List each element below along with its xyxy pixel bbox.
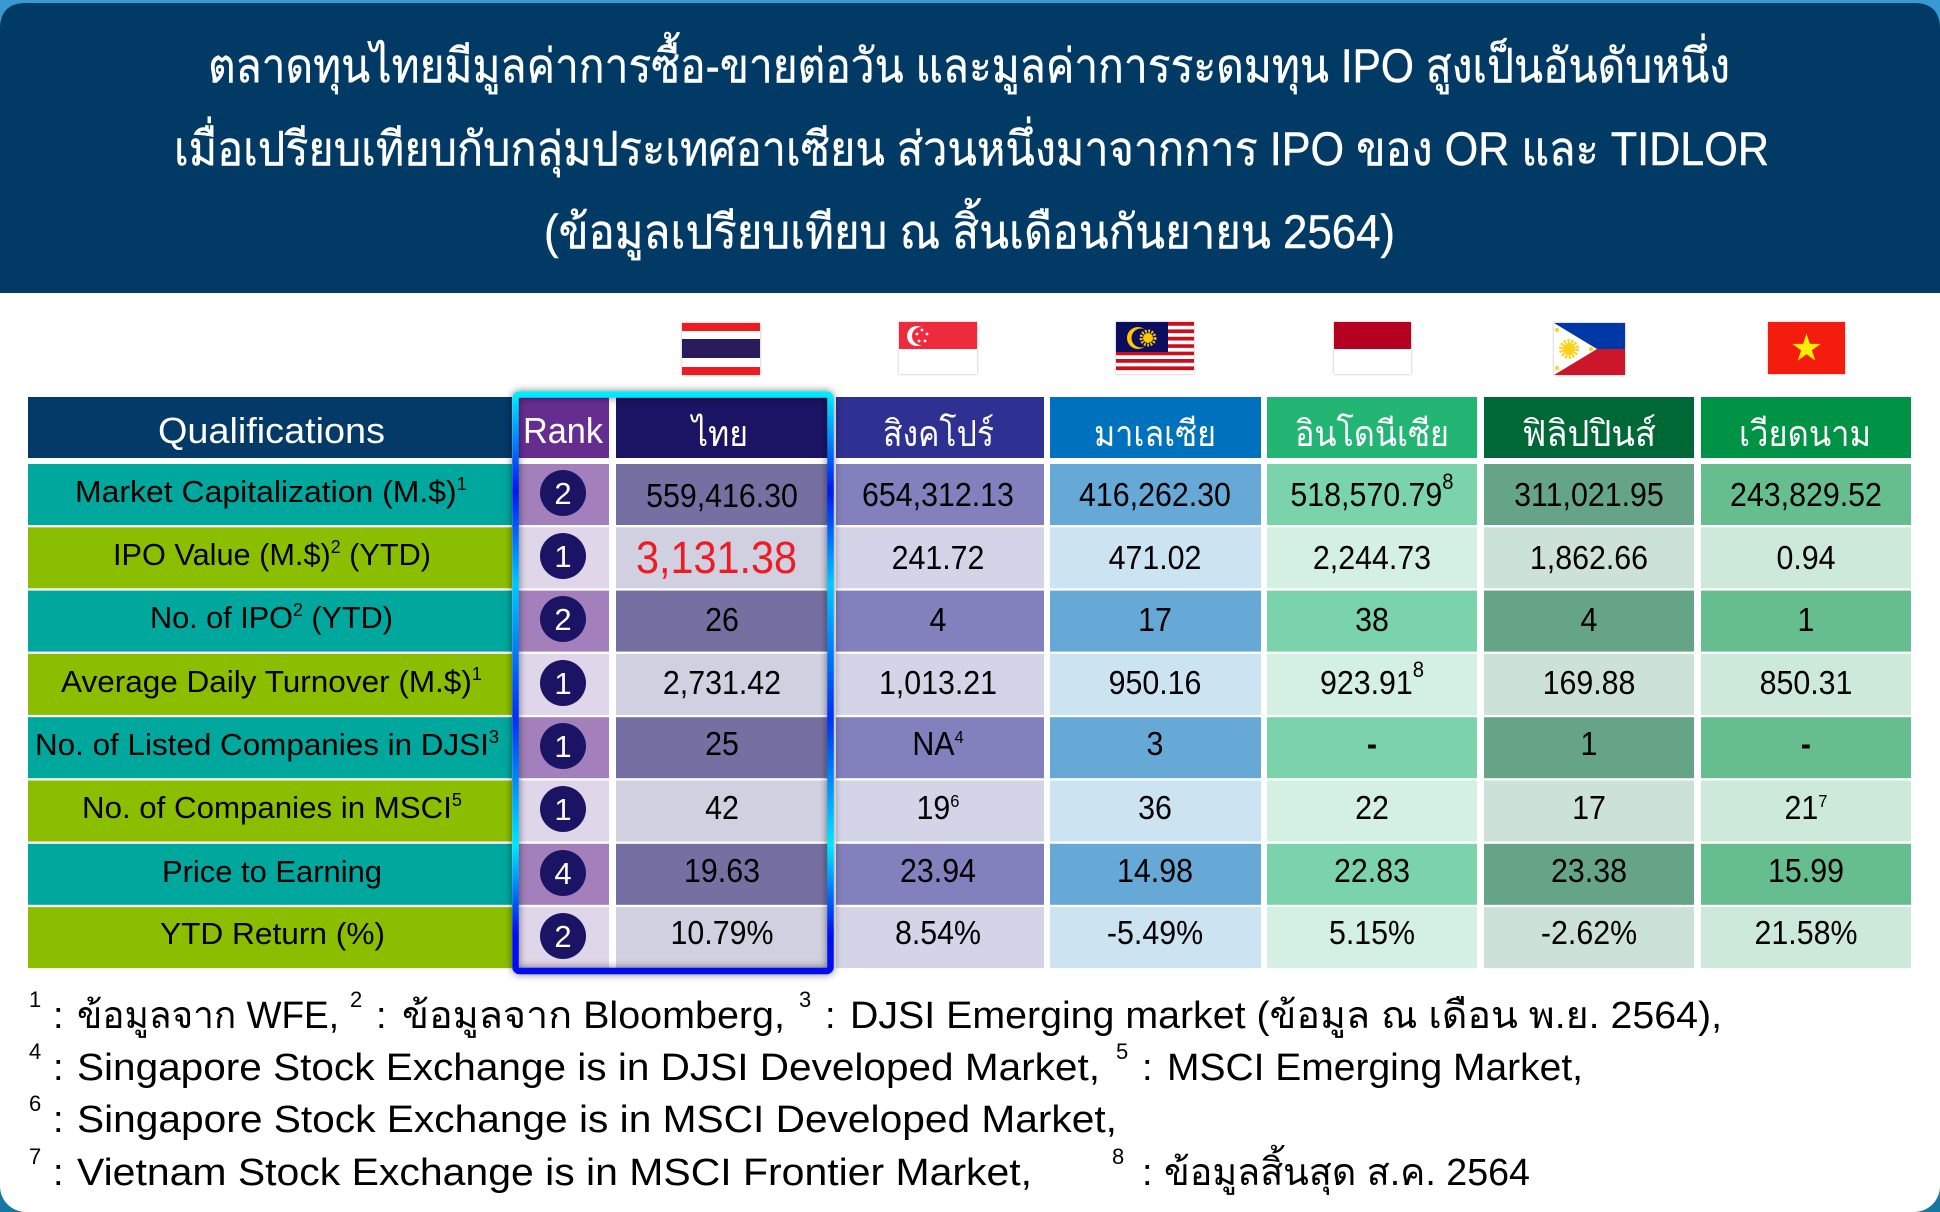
footnote line 1: : bbox=[376, 995, 387, 1037]
row: YTD Return: 5.15% bbox=[1329, 914, 1415, 951]
footnote line 2 bbox=[29, 1039, 1583, 1089]
row: No. of IPO: No. of IPO bbox=[150, 600, 295, 635]
footnote line 2: : bbox=[53, 1047, 64, 1089]
row: No. of Companies in MSCI: 1 bbox=[554, 792, 572, 827]
row: No. of Listed Companies in DJSI: 1 bbox=[554, 729, 572, 764]
row: Price to Earning: 22.83 bbox=[1334, 852, 1410, 889]
row: YTD Return: YTD Return (%) bbox=[160, 916, 385, 951]
footnote line 4: 7 bbox=[29, 1144, 41, 1169]
footnote line 2: 5 bbox=[1116, 1039, 1128, 1064]
row: Average Daily Turnover: 1 bbox=[554, 666, 572, 701]
row: YTD Return: -5.49% bbox=[1107, 914, 1203, 951]
row: IPO Value bbox=[28, 527, 1911, 588]
footnote line 4 bbox=[29, 1144, 1530, 1195]
row: Average Daily Turnover: 923.91 bbox=[1320, 664, 1413, 701]
header: Rank bbox=[516, 397, 609, 458]
footnote line 1: ข้อมูลจาก Bloomberg, bbox=[402, 995, 785, 1038]
row: No. of Listed Companies in DJSI: NA bbox=[912, 725, 954, 762]
row: No. of Companies in MSCI: 21 bbox=[1785, 789, 1818, 826]
row: No. of Listed Companies in DJSI bbox=[28, 717, 1911, 778]
row: Price to Earning: 4 bbox=[554, 856, 572, 891]
footnote line 3: 6 bbox=[29, 1091, 41, 1116]
flag: Vietnam bbox=[1768, 322, 1845, 374]
footnote line 4: : bbox=[53, 1152, 64, 1194]
row: No. of IPO: 4 bbox=[1581, 601, 1597, 638]
row: IPO Value: 2,244.73 bbox=[1313, 539, 1431, 576]
flag: Thailand bbox=[682, 323, 760, 375]
row: Average Daily Turnover: Average Daily Turnover (M.$) bbox=[61, 664, 465, 699]
table header row bbox=[28, 397, 1911, 458]
row: YTD Return: 10.79% bbox=[671, 914, 773, 951]
row: IPO Value: (YTD) bbox=[341, 537, 431, 572]
row: No. of IPO: 1 bbox=[1798, 601, 1814, 638]
title banner: (ข้อมูลเปรียบเทียบ ณ สิ้นเดือนกันยายน 2564) bbox=[544, 198, 1395, 261]
row: No. of IPO: 38 bbox=[1355, 601, 1389, 638]
footnote line 2: Singapore Stock Exchange is in DJSI Developed Market, bbox=[77, 1047, 1100, 1089]
header: Thailand: ไทย bbox=[689, 413, 748, 454]
row: Market Capitalization: 518,570.79 bbox=[1290, 476, 1442, 513]
row: YTD Return: 21.58% bbox=[1755, 914, 1857, 951]
row: Market Capitalization: 243,829.52 bbox=[1730, 476, 1882, 513]
footnote line 1: 3 bbox=[799, 987, 811, 1012]
highlight frame around Thailand column bbox=[516, 394, 830, 971]
header: Indonesia bbox=[1267, 397, 1477, 458]
header: Qualifications: Qualifications bbox=[158, 410, 385, 451]
row: No. of Listed Companies in DJSI: - bbox=[1801, 725, 1811, 762]
footnote line 1 bbox=[29, 987, 1722, 1038]
row: Market Capitalization bbox=[28, 464, 1911, 525]
header: Singapore: สิงคโปร์ bbox=[883, 413, 994, 454]
footnote line 4: Vietnam Stock Exchange is in MSCI Frontier Market, bbox=[77, 1152, 1032, 1194]
header: Philippines bbox=[1484, 397, 1694, 458]
row: Average Daily Turnover bbox=[28, 654, 1911, 715]
row: No. of IPO: (YTD) bbox=[303, 600, 393, 635]
row: No. of Listed Companies in DJSI: 3 bbox=[1147, 725, 1163, 762]
row: Market Capitalization: 8 bbox=[1442, 470, 1454, 494]
row: IPO Value: IPO Value (M.$) bbox=[113, 537, 333, 572]
header: Vietnam: เวียดนาม bbox=[1739, 413, 1871, 454]
row: Market Capitalization: Market Capitalization (M.$) bbox=[75, 474, 445, 509]
row: No. of Companies in MSCI bbox=[28, 780, 1911, 842]
footnote line 4: ข้อมูลสิ้นสุด ส.ค. 2564 bbox=[1164, 1144, 1530, 1195]
row: YTD Return: 2 bbox=[554, 919, 572, 954]
header: Malaysia: มาเลเซีย bbox=[1094, 413, 1216, 454]
footnote line 2: : bbox=[1142, 1047, 1153, 1089]
row: Price to Earning bbox=[28, 844, 1911, 905]
row: No. of Companies in MSCI: No. of Companies in MSCI bbox=[82, 790, 449, 825]
row: IPO Value: 0.94 bbox=[1776, 539, 1836, 576]
row: No. of Companies in MSCI: 19 bbox=[917, 789, 950, 826]
footnote line 1: 2 bbox=[350, 987, 362, 1012]
flag: Malaysia bbox=[1116, 322, 1194, 374]
row: Market Capitalization: 416,262.30 bbox=[1079, 476, 1231, 513]
row: Market Capitalization: 654,312.13 bbox=[862, 476, 1014, 513]
title banner bbox=[0, 3, 1940, 293]
footnote line 1: : bbox=[825, 995, 836, 1037]
row: IPO Value: 471.02 bbox=[1109, 539, 1201, 576]
row: No. of IPO: 17 bbox=[1138, 601, 1172, 638]
row: IPO Value: 241.72 bbox=[892, 539, 984, 576]
footnote line 1: DJSI Emerging market (ข้อมูล ณ เดือน พ.ย. 2564), bbox=[850, 995, 1722, 1038]
row: Market Capitalization: 311,021.95 bbox=[1514, 476, 1664, 513]
row: IPO Value: 1,862.66 bbox=[1530, 539, 1648, 576]
flag: Singapore bbox=[899, 322, 977, 374]
row: Average Daily Turnover: 169.88 bbox=[1543, 664, 1635, 701]
footnotes bbox=[29, 987, 1722, 1195]
row: No. of Companies in MSCI: 5 bbox=[452, 790, 462, 810]
row: YTD Return bbox=[28, 907, 1911, 968]
row: IPO Value: 1 bbox=[554, 539, 572, 574]
row: No. of Listed Companies in DJSI: No. of Listed Companies in DJSI bbox=[35, 727, 483, 762]
row: Price to Earning: 23.38 bbox=[1551, 852, 1627, 889]
row: YTD Return: -2.62% bbox=[1541, 914, 1637, 951]
row: Price to Earning: 15.99 bbox=[1768, 852, 1844, 889]
flag: Philippines bbox=[1554, 323, 1625, 375]
footnote line 2: MSCI Emerging Market, bbox=[1167, 1047, 1583, 1089]
row: Average Daily Turnover: 850.31 bbox=[1760, 664, 1852, 701]
footnote line 2: 4 bbox=[29, 1039, 41, 1064]
footnote line 3: Singapore Stock Exchange is in MSCI Developed Market, bbox=[77, 1099, 1117, 1141]
row: Market Capitalization: 559,416.30 bbox=[646, 477, 798, 514]
row: No. of IPO: 2 bbox=[554, 602, 572, 637]
row: No. of IPO: 26 bbox=[705, 601, 739, 638]
header: Vietnam bbox=[1701, 397, 1911, 458]
row: No. of Listed Companies in DJSI: 4 bbox=[954, 726, 964, 747]
header: Rank: Rank bbox=[523, 410, 604, 451]
row: No. of IPO: 4 bbox=[930, 601, 946, 638]
row: No. of Listed Companies in DJSI: 3 bbox=[489, 727, 499, 747]
row: Price to Earning: 19.63 bbox=[684, 852, 760, 889]
row: Average Daily Turnover: 950.16 bbox=[1109, 664, 1201, 701]
row: Market Capitalization: 1 bbox=[457, 474, 467, 494]
row: IPO Value: 2 bbox=[331, 537, 341, 557]
row: No. of Companies in MSCI: 7 bbox=[1818, 790, 1827, 811]
footnote line 1: ข้อมูลจาก WFE, bbox=[77, 995, 339, 1038]
row: No. of Companies in MSCI: 6 bbox=[950, 790, 959, 811]
footnote line 4: 8 bbox=[1112, 1144, 1124, 1169]
flag: Indonesia bbox=[1334, 322, 1411, 374]
footnote line 3: : bbox=[53, 1099, 64, 1141]
row: No. of Companies in MSCI: 36 bbox=[1138, 789, 1172, 826]
header: Qualifications bbox=[28, 397, 512, 458]
row: No. of Companies in MSCI: 22 bbox=[1355, 789, 1389, 826]
row: Average Daily Turnover: 1 bbox=[472, 664, 482, 684]
header: Malaysia bbox=[1050, 397, 1261, 458]
row: Average Daily Turnover: 2,731.42 bbox=[663, 664, 781, 701]
row: No. of Listed Companies in DJSI: 25 bbox=[705, 725, 739, 762]
header: Thailand bbox=[616, 397, 830, 458]
row: No. of Companies in MSCI: 17 bbox=[1572, 789, 1606, 826]
row: Market Capitalization: 2 bbox=[554, 476, 572, 511]
row: YTD Return: 8.54% bbox=[895, 914, 981, 951]
row: Average Daily Turnover: 8 bbox=[1413, 658, 1424, 682]
row: No. of Listed Companies in DJSI: - bbox=[1367, 725, 1377, 762]
row: Price to Earning: 23.94 bbox=[900, 852, 976, 889]
title banner: เมื่อเปรียบเทียบกับกลุ่มประเทศอาเซียน ส่วนหนึ่งมาจากการ IPO ของ OR และ TIDLOR bbox=[174, 116, 1769, 178]
header: Singapore bbox=[836, 397, 1044, 458]
row: Average Daily Turnover: 1,013.21 bbox=[879, 664, 997, 701]
row: No. of IPO: 2 bbox=[293, 600, 303, 620]
footnote line 1: 1 bbox=[29, 987, 41, 1012]
footnote line 1: : bbox=[53, 995, 64, 1037]
header: Philippines: ฟิลิปปินส์ bbox=[1522, 413, 1656, 454]
footnote line 4: : bbox=[1142, 1152, 1153, 1194]
row: Price to Earning: 14.98 bbox=[1117, 852, 1193, 889]
row: No. of Listed Companies in DJSI: 1 bbox=[1581, 725, 1597, 762]
row: No. of Companies in MSCI: 42 bbox=[705, 789, 739, 826]
flags row bbox=[682, 322, 1845, 375]
title banner: ตลาดทุนไทยมีมูลค่าการซื้อ-ขายต่อวัน และมูลค่าการระดมทุน IPO สูงเป็นอันดับหนึ่ง bbox=[208, 32, 1730, 95]
row: No. of IPO bbox=[28, 591, 1911, 652]
header: Indonesia: อินโดนีเซีย bbox=[1295, 413, 1449, 454]
row: IPO Value: 3,131.38 bbox=[636, 533, 797, 583]
row: Price to Earning: Price to Earning bbox=[162, 854, 382, 889]
